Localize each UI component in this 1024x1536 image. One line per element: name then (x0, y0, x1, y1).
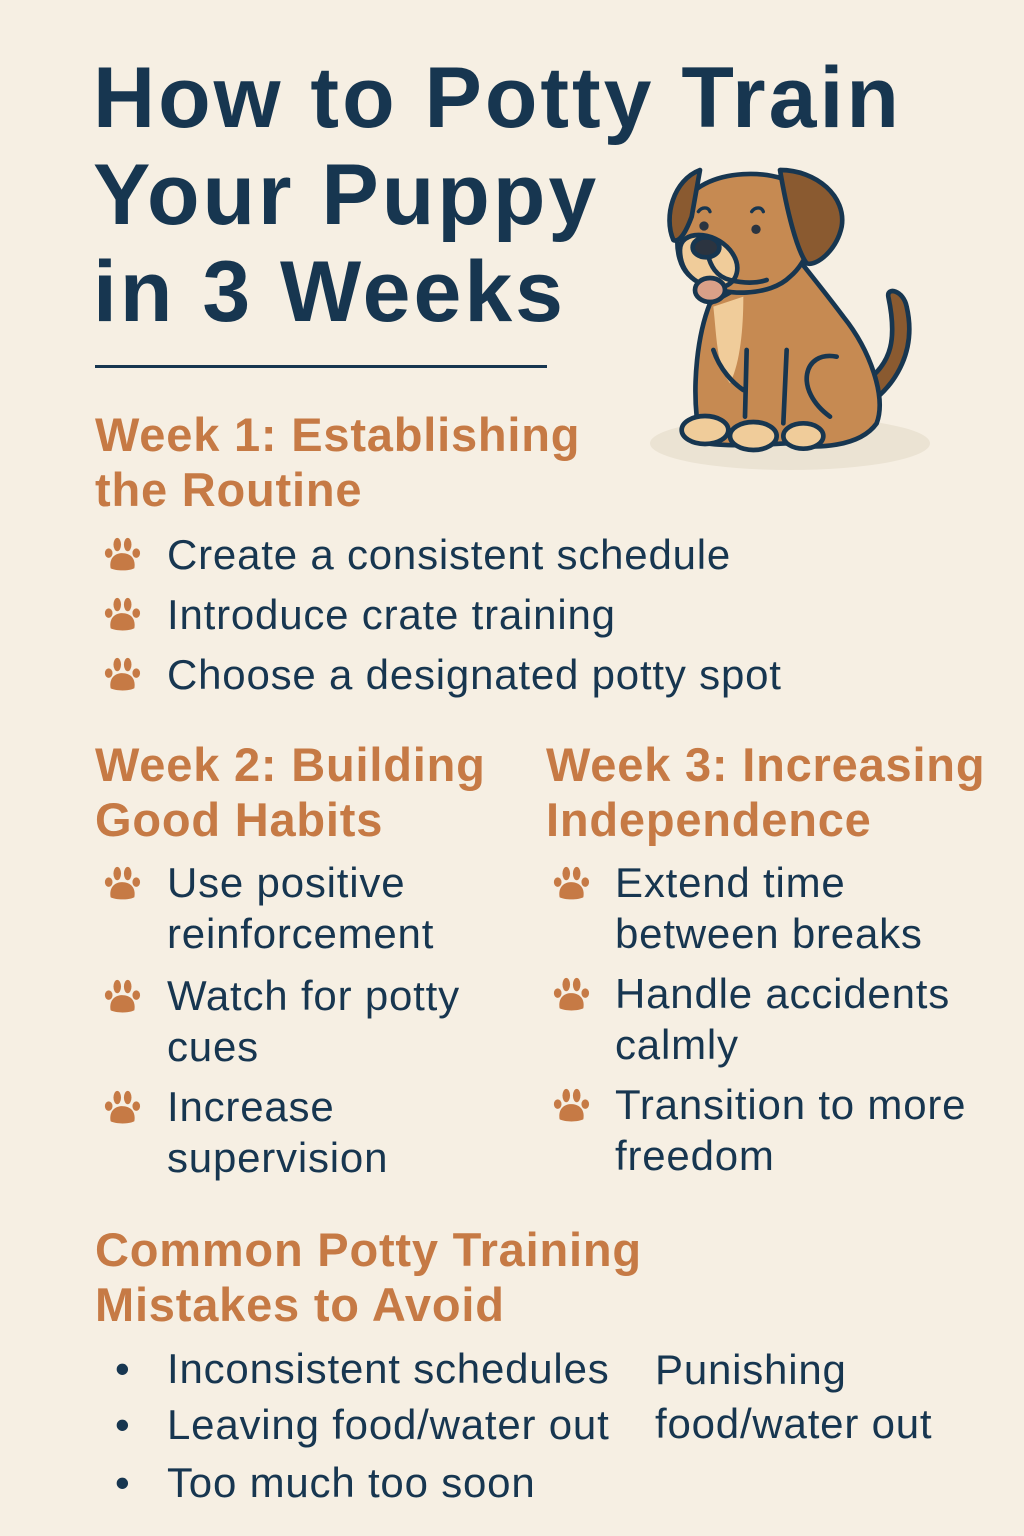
item: potty spot: Choose a designated potty spot (167, 651, 782, 698)
item: supervision (167, 1134, 388, 1181)
heading: week 2: Good Habits (95, 793, 383, 846)
heading: common mistakes: Common Potty Training (95, 1223, 642, 1276)
text: punishing: food/water out (655, 1400, 932, 1447)
heading: week 1 (95, 408, 580, 516)
item: • (115, 1401, 131, 1448)
item: crate: Introduce crate training (167, 591, 616, 638)
item (554, 859, 923, 957)
item: Use positive (167, 859, 405, 906)
heading: week 2 (95, 738, 486, 846)
heading: week 3: Week 3: Increasing (546, 738, 985, 791)
item: Inconsistent schedules (167, 1345, 610, 1392)
item: schedule: Create a consistent schedule (167, 531, 731, 578)
item: Transition to more (615, 1081, 966, 1128)
item: Too much too soon (167, 1459, 536, 1506)
item: freedom (615, 1132, 775, 1179)
item: Handle accidents (615, 970, 950, 1017)
divider under title (95, 365, 547, 368)
item: calmly (615, 1021, 739, 1068)
item: • (115, 1459, 131, 1506)
title: Your Puppy (93, 147, 599, 243)
heading: common mistakes: Mistakes to Avoid (95, 1278, 505, 1331)
item (554, 970, 950, 1068)
item: cues (167, 1023, 259, 1070)
title: in 3 Weeks (93, 244, 566, 340)
item: Leaving food/water out (167, 1401, 610, 1448)
list: week 2 (104, 859, 460, 1181)
item: reinforcement (167, 910, 434, 957)
title: How to Potty Train (93, 50, 902, 146)
illustration: puppy (650, 168, 930, 470)
heading: week 3: Independence (546, 793, 872, 846)
item (104, 1083, 388, 1181)
text: punishing (655, 1346, 932, 1447)
heading: common mistakes (95, 1223, 642, 1331)
list: week 3 (554, 859, 966, 1179)
heading: week 3 (546, 738, 985, 846)
heading: week 2: Week 2: Building (95, 738, 486, 791)
item (554, 1081, 966, 1179)
heading: week 1: Week 1: Establishing (95, 408, 580, 461)
title (93, 50, 902, 340)
list: week 1 (104, 531, 782, 698)
item: Watch for potty (167, 972, 460, 1019)
item: between breaks (615, 910, 923, 957)
item: Increase (167, 1083, 334, 1130)
item (104, 972, 460, 1070)
list: mistakes (115, 1345, 610, 1506)
text: punishing: Punishing (655, 1346, 847, 1393)
item: Extend time (615, 859, 846, 906)
item: • (115, 1345, 131, 1392)
item (104, 859, 434, 957)
heading: week 1: the Routine (95, 463, 362, 516)
